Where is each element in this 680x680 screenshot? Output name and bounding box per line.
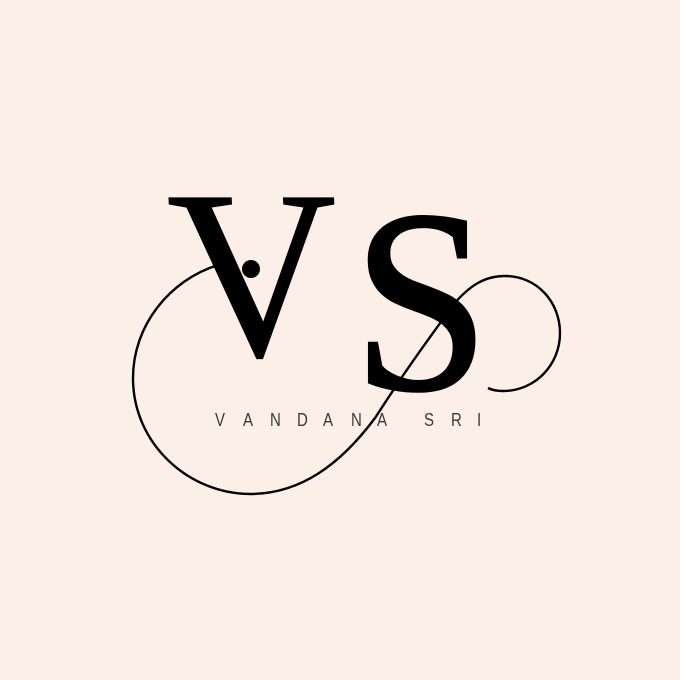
- brand name: VANDANASRI: [215, 409, 481, 430]
- letter V: V: [164, 142, 346, 407]
- swirl flourish line with ball terminal: [133, 260, 560, 494]
- letter S: S: [352, 157, 490, 446]
